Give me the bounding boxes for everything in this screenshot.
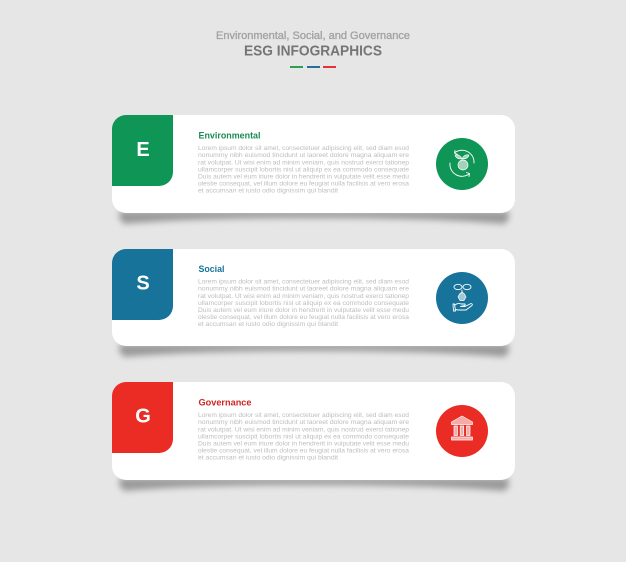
panel: governance	[112, 382, 515, 491]
body text: ullamcorper suscipit lobortis nisl ut aliquip ex ea commodo consequate	[198, 300, 409, 307]
body text	[198, 412, 409, 462]
body text: rat volutpat. Ut wisi enim ad minim veniam, quis nostrud exerci tationep	[198, 426, 409, 433]
title: ESG INFOGRAPHICS	[244, 42, 382, 60]
body text: Duis autem vel eum iriure dolor in hendrerit in vulputate velit esse medu	[198, 174, 409, 180]
icon: recycling globe and leaves	[436, 138, 488, 190]
body text: rat volutpat. Ut wisi enim ad minim veniam, quis nostrud exerci tationep	[198, 293, 409, 300]
heading: Environmental	[198, 131, 260, 142]
card	[112, 115, 515, 213]
body text	[198, 278, 409, 328]
letter: S	[136, 272, 150, 294]
panel: social	[112, 249, 515, 357]
body text: olestie consequat, vel illum dolore eu feugiat nulla facilisis at vero erosa	[198, 448, 409, 455]
card shadow	[119, 478, 509, 491]
body text: olestie consequat, vel illum dolore eu feugiat nulla facilisis at vero erosa	[198, 181, 409, 188]
body text: et accumsan et iusto odio dignissim qui blandit	[198, 455, 338, 462]
card shadow	[119, 344, 509, 357]
body text: nonummy nibh euismod tincidunt ut laoreet dolore magna aliquam ere	[198, 152, 409, 159]
panel: environmental	[112, 115, 515, 224]
card	[112, 382, 515, 480]
body text: ullamcorper suscipit lobortis nisl ut aliquip ex ea commodo consequate	[198, 433, 409, 440]
body text: Lorem ipsum dolor sit amet, consectetuer adipiscing elit, sed diam esod	[198, 278, 409, 286]
body text: Duis autem vel eum iriure dolor in hendrerit in vulputate velit esse medu	[198, 440, 409, 448]
subtitle: Environmental, Social, and Governance	[216, 30, 410, 42]
icon: hand holding plant	[436, 272, 488, 324]
body text: et accumsan et iusto odio dignissim qui blandit	[198, 188, 338, 195]
card	[112, 249, 515, 346]
body text: et accumsan et iusto odio dignissim qui blandit	[198, 321, 338, 328]
body text: nonummy nibh euismod tincidunt ut laoreet dolore magna aliquam ere	[198, 286, 409, 293]
icon: classical government building	[436, 405, 488, 457]
colour dashes	[290, 66, 336, 68]
letter tab	[112, 115, 173, 186]
letter: G	[135, 406, 151, 428]
letter tab	[112, 382, 173, 453]
body text: olestie consequat, vel illum dolore eu feugiat nulla facilisis at vero erosa	[198, 314, 409, 321]
body text: nonummy nibh euismod tincidunt ut laoreet dolore magna aliquam ere	[198, 419, 409, 426]
card shadow	[119, 211, 509, 224]
body text: Lorem ipsum dolor sit amet, consectetuer adipiscing elit, sed diam esod	[198, 412, 409, 419]
body text	[198, 145, 409, 195]
heading: Governance	[198, 398, 252, 409]
body text: rat volutpat. Ut wisi enim ad minim veniam, quis nostrud exerci tationep	[198, 159, 409, 166]
body text: ullamcorper suscipit lobortis nisl ut aliquip ex ea commodo consequate	[198, 166, 409, 173]
heading: Social	[198, 264, 224, 275]
body text: Lorem ipsum dolor sit amet, consectetuer adipiscing elit, sed diam esod	[198, 145, 409, 152]
header	[216, 30, 410, 68]
letter tab	[112, 249, 173, 320]
letter: E	[136, 139, 150, 161]
body text: Duis autem vel eum iriure dolor in hendrerit in vulputate velit esse medu	[198, 307, 409, 314]
